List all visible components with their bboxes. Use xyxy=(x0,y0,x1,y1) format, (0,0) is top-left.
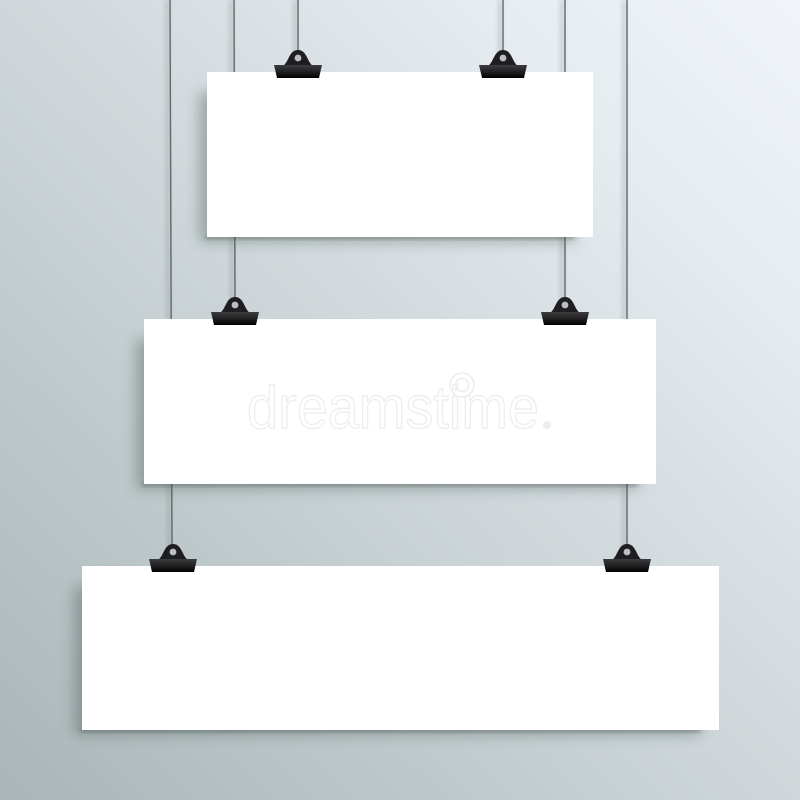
icon: bottom banner left clip xyxy=(149,544,197,572)
icon: middle banner right clip xyxy=(541,297,589,325)
panel: bottom banner xyxy=(82,566,719,730)
watermark: dreamstime xyxy=(247,374,539,441)
icon: bottom banner right clip xyxy=(603,544,651,572)
icon: middle banner left clip xyxy=(211,297,259,325)
panel: top banner xyxy=(207,72,593,237)
panel: middle banner xyxy=(144,319,656,484)
icon: top banner right clip xyxy=(479,50,527,78)
string shadows xyxy=(167,0,624,550)
hanging strings xyxy=(170,0,627,550)
icon: top banner left clip xyxy=(274,50,322,78)
panel shadows xyxy=(74,92,701,735)
